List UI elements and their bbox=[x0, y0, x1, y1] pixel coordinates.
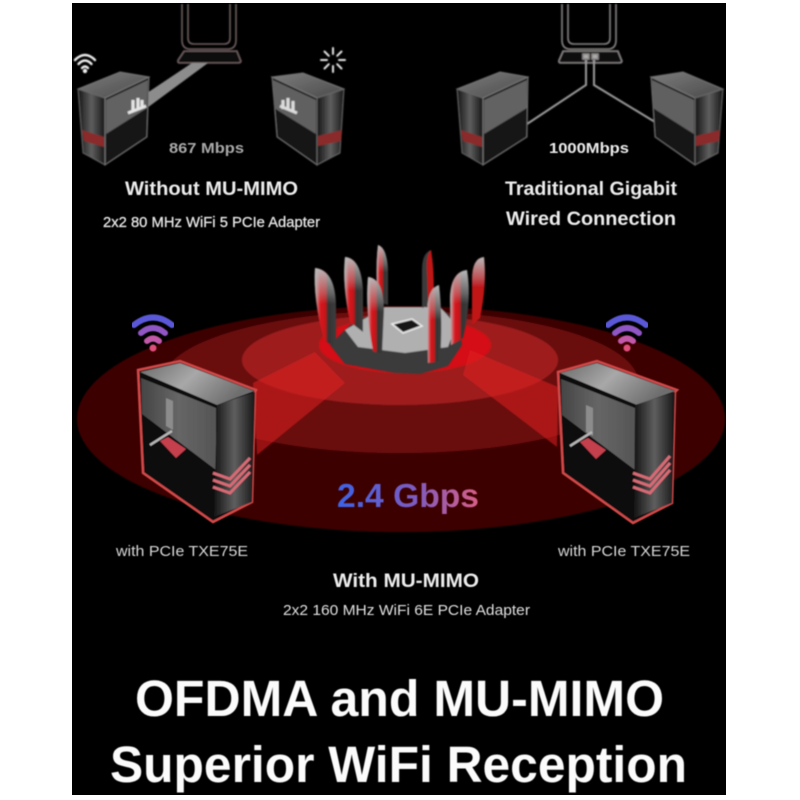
icon: wifi right bbox=[608, 318, 646, 350]
heading: traditional gigabit wired connection bbox=[505, 179, 678, 230]
signal beams bbox=[253, 350, 558, 455]
computer tower left bbox=[457, 72, 528, 165]
heading: traditional gigabit wired connection: Wired Connection bbox=[506, 209, 676, 230]
label: PCIe left: with PCIe TXE75E bbox=[115, 543, 248, 560]
front antennas bbox=[315, 268, 441, 363]
icon: white wifi bbox=[75, 55, 95, 72]
computer tower left bbox=[78, 72, 149, 165]
router outline bbox=[178, 4, 241, 63]
text: WiFi 5 adapter: 2x2 80 MHz WiFi 5 PCIe Adapter bbox=[103, 214, 320, 231]
panel: without MU-MIMO diagram bbox=[75, 4, 345, 165]
text: 867 Mbps: 867 Mbps bbox=[169, 140, 244, 157]
title: OFDMA and MU-MIMO bbox=[135, 670, 664, 727]
icon: loading spinner bbox=[321, 48, 345, 72]
signal beam bbox=[147, 63, 208, 108]
router top plate bbox=[345, 307, 456, 353]
ethernet wires bbox=[527, 60, 655, 124]
text: 1000Mbps: 1000Mbps bbox=[549, 140, 629, 157]
computer tower left bbox=[138, 361, 256, 522]
computer tower right bbox=[272, 73, 344, 165]
panel: with MU-MIMO diagram bbox=[77, 245, 725, 532]
computer tower right bbox=[651, 72, 723, 165]
panel: wired connection diagram bbox=[457, 4, 723, 165]
coverage rings bbox=[77, 306, 725, 532]
text: WiFi 6E adapter: 2x2 160 MHz WiFi 6E PCIe Adapter bbox=[283, 602, 530, 619]
rear antennas bbox=[344, 245, 485, 345]
router outline bbox=[559, 4, 622, 63]
label: PCIe right: with PCIe TXE75E bbox=[557, 543, 690, 560]
text: 2.4 Gbps: 2.4 Gbps bbox=[337, 477, 479, 514]
title: Superior WiFi Reception bbox=[110, 736, 687, 793]
title bbox=[110, 670, 687, 793]
gaming router bbox=[315, 245, 485, 374]
computer tower right bbox=[558, 361, 677, 523]
router body bbox=[330, 307, 462, 374]
heading: without MU-MIMO: Without MU-MIMO bbox=[125, 179, 298, 200]
heading: with MU-MIMO: With MU-MIMO bbox=[333, 571, 479, 592]
icon: wifi left bbox=[134, 318, 172, 350]
heading: traditional gigabit wired connection: Traditional Gigabit bbox=[505, 179, 678, 200]
